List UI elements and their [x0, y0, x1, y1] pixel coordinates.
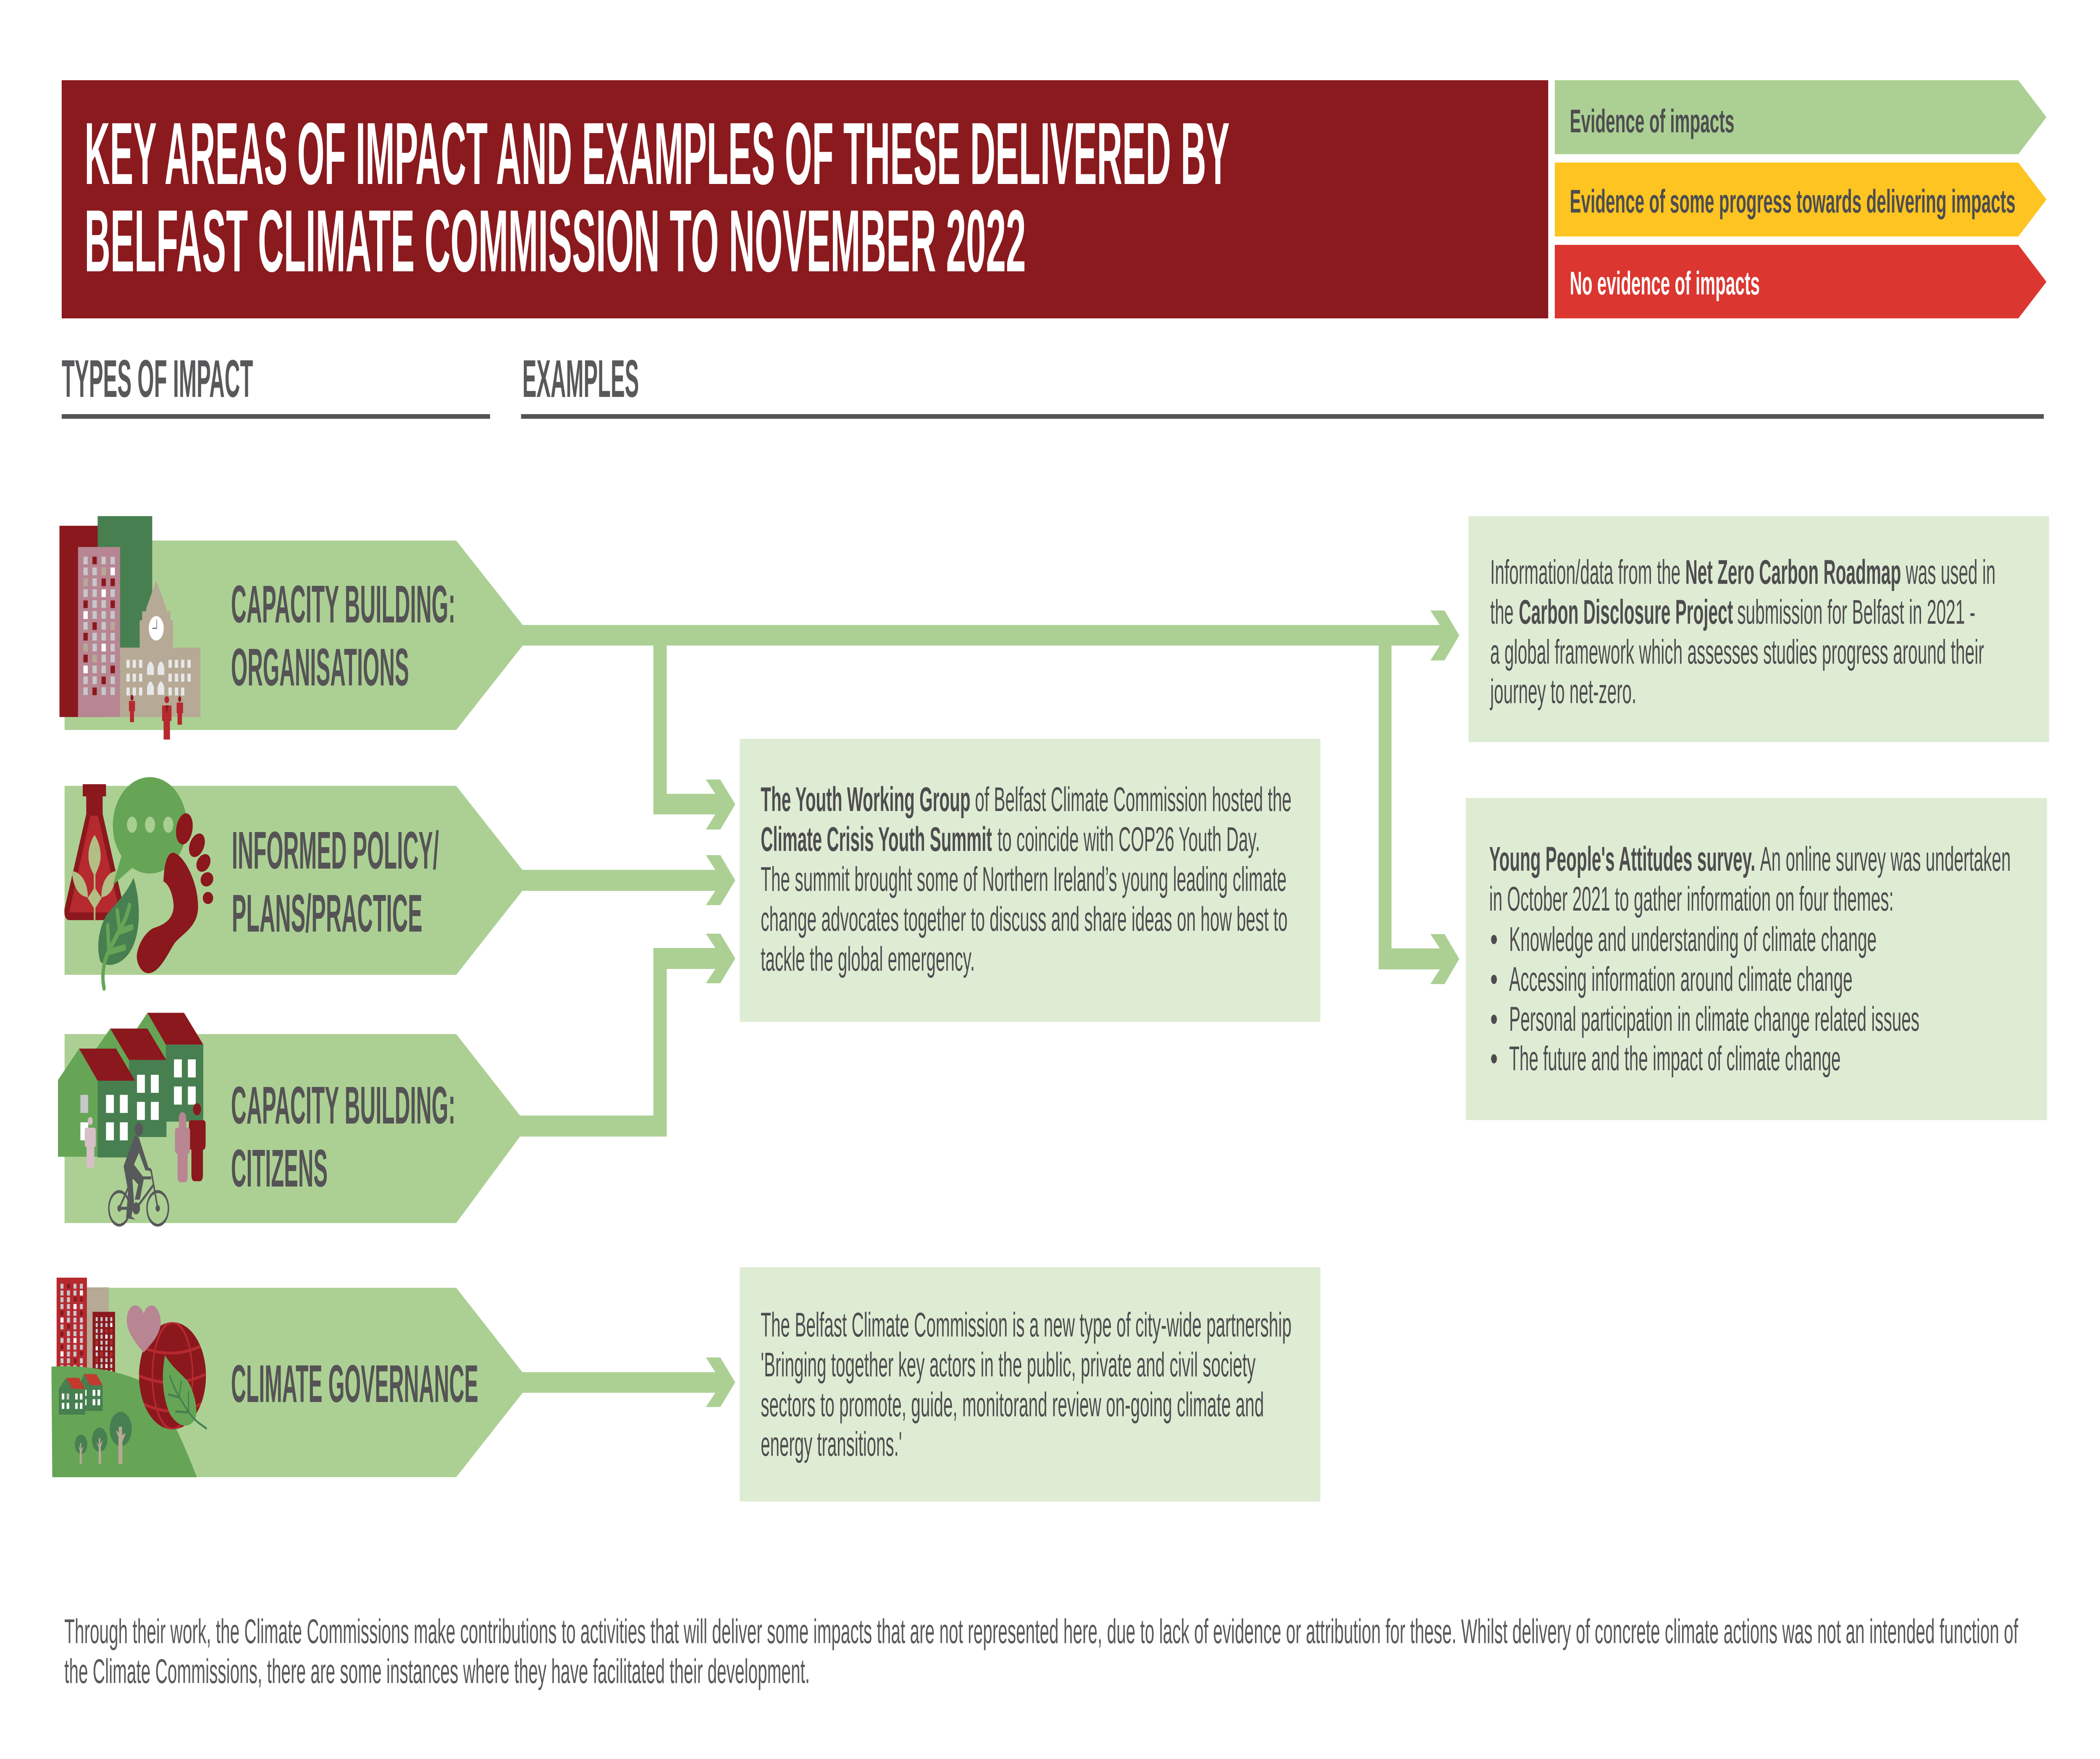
panel: city-wide partnership example: energy transitions.': [761, 1425, 902, 1463]
panel: city-wide partnership example: sectors to promote, guide, monitorand review on-going climate and: [761, 1386, 1264, 1424]
arrow: governance to partnership box: [520, 1357, 735, 1407]
legend: no evidence: No evidence of impacts: [1570, 265, 1760, 302]
arrow: citizens to youth summit: [518, 934, 735, 1137]
panel: attitudes survey example: in October 2021 to gather information on four themes:: [1489, 880, 1894, 918]
panel: attitudes survey example: •: [1490, 960, 1498, 998]
panel: capacity building citizens: [65, 1034, 530, 1223]
icon: buildings and people: [60, 516, 200, 740]
panel: city-wide partnership example: [740, 1267, 1320, 1502]
panel: capacity building citizens: CAPACITY BUILDING:: [231, 1076, 455, 1135]
title banner: BELFAST CLIMATE COMMISSION TO NOVEMBER 2022: [84, 192, 1026, 291]
panel: informed policy: [65, 786, 531, 975]
panel: attitudes survey example: [1466, 798, 2047, 1120]
panel: net zero roadmap example: was used in: [1906, 553, 1995, 591]
panel: youth summit example: The Youth Working Group: [761, 780, 971, 819]
panel: net zero roadmap example: Carbon Disclosure Project: [1519, 593, 1733, 631]
title banner: [62, 80, 1548, 318]
legend: some progress: [1555, 163, 2046, 236]
legend: evidence of impacts: Evidence of impacts: [1570, 102, 1734, 139]
arrow: informed policy to youth summit: [520, 855, 735, 905]
panel: youth summit example: tackle the global emergency.: [761, 940, 975, 978]
heading: examples: EXAMPLES: [522, 349, 639, 409]
icon: houses, cyclist and citizens: [58, 1013, 206, 1225]
panel: climate governance: CLIMATE GOVERNANCE: [231, 1355, 478, 1414]
legend: evidence of impacts: [1555, 80, 2046, 154]
panel: net zero roadmap example: Net Zero Carbon Roadmap: [1685, 553, 1901, 591]
panel: capacity building organisations: CAPACITY BUILDING:: [231, 575, 455, 634]
panel: attitudes survey example: Young People's Attitudes survey.: [1489, 840, 1755, 878]
panel: net zero roadmap example: a global framework which assesses studies progress around their: [1490, 633, 1984, 671]
panel: capacity building organisations: ORGANISATIONS: [231, 638, 409, 697]
footnote: [64, 1612, 2019, 1691]
arrow: main to attitudes survey: [1378, 643, 1459, 984]
panel: net zero roadmap example: [1468, 516, 2049, 742]
panel: informed policy: PLANS/PRACTICE: [232, 884, 423, 943]
panel: attitudes survey example: •: [1490, 920, 1498, 958]
title banner: KEY AREAS OF IMPACT AND EXAMPLES OF THESE DELIVERED BY: [84, 105, 1230, 203]
heading: types of impact: [62, 349, 490, 419]
panel: youth summit example: The summit brought some of Northern Ireland’s young leading climate: [761, 860, 1286, 898]
arrow: main to carbon roadmap: [520, 611, 1459, 660]
panel: city-wide partnership example: 'Bringing together key actors in the public, private and civil society: [761, 1346, 1256, 1384]
panel: climate governance: [65, 1288, 531, 1477]
panel: youth summit example: Climate Crisis Youth Summit: [761, 820, 992, 858]
panel: youth summit example: change advocates together to discuss and share ideas on how best to: [761, 900, 1288, 938]
panel: attitudes survey example: Accessing information around climate change: [1509, 960, 1853, 998]
panel: informed policy: INFORMED POLICY/: [232, 821, 439, 880]
icon: city, hill, heart and globe: [51, 1278, 207, 1477]
heading: types of impact: TYPES OF IMPACT: [62, 349, 253, 409]
panel: net zero roadmap example: submission for Belfast in 2021 -: [1737, 593, 1975, 631]
panel: attitudes survey example: •: [1490, 1040, 1498, 1078]
heading: examples: [521, 349, 2044, 419]
panel: attitudes survey example: An online survey was undertaken: [1760, 840, 2011, 878]
legend: no evidence: [1555, 245, 2046, 318]
panel: attitudes survey example: Personal participation in climate change related issues: [1509, 1000, 1919, 1038]
panel: net zero roadmap example: journey to net-zero.: [1490, 672, 1636, 711]
footnote: the Climate Commissions, there are some instances where they have facilitated their development.: [64, 1652, 810, 1691]
panel: city-wide partnership example: The Belfast Climate Commission is a new type of city-wide partnership: [761, 1306, 1292, 1344]
panel: youth summit example: of Belfast Climate Commission hosted the: [975, 780, 1292, 819]
arrow: organisations to youth summit: [654, 643, 735, 830]
panel: net zero roadmap example: Information/data from the: [1490, 553, 1680, 591]
panel: net zero roadmap example: the: [1490, 593, 1514, 631]
panel: attitudes survey example: The future and the impact of climate change: [1509, 1040, 1841, 1078]
panel: attitudes survey example: •: [1490, 1000, 1498, 1038]
legend: [1555, 80, 2046, 318]
icon: flask, speech bubble, leaf and footprint: [64, 777, 214, 988]
panel: youth summit example: [740, 739, 1320, 1022]
panel: capacity building organisations: [65, 541, 531, 730]
legend: some progress: Evidence of some progress towards delivering impacts: [1570, 183, 2016, 220]
panel: attitudes survey example: Knowledge and understanding of climate change: [1509, 920, 1877, 958]
panel: capacity building citizens: CITIZENS: [231, 1139, 328, 1198]
panel: youth summit example: to coincide with COP26 Youth Day.: [998, 820, 1260, 858]
